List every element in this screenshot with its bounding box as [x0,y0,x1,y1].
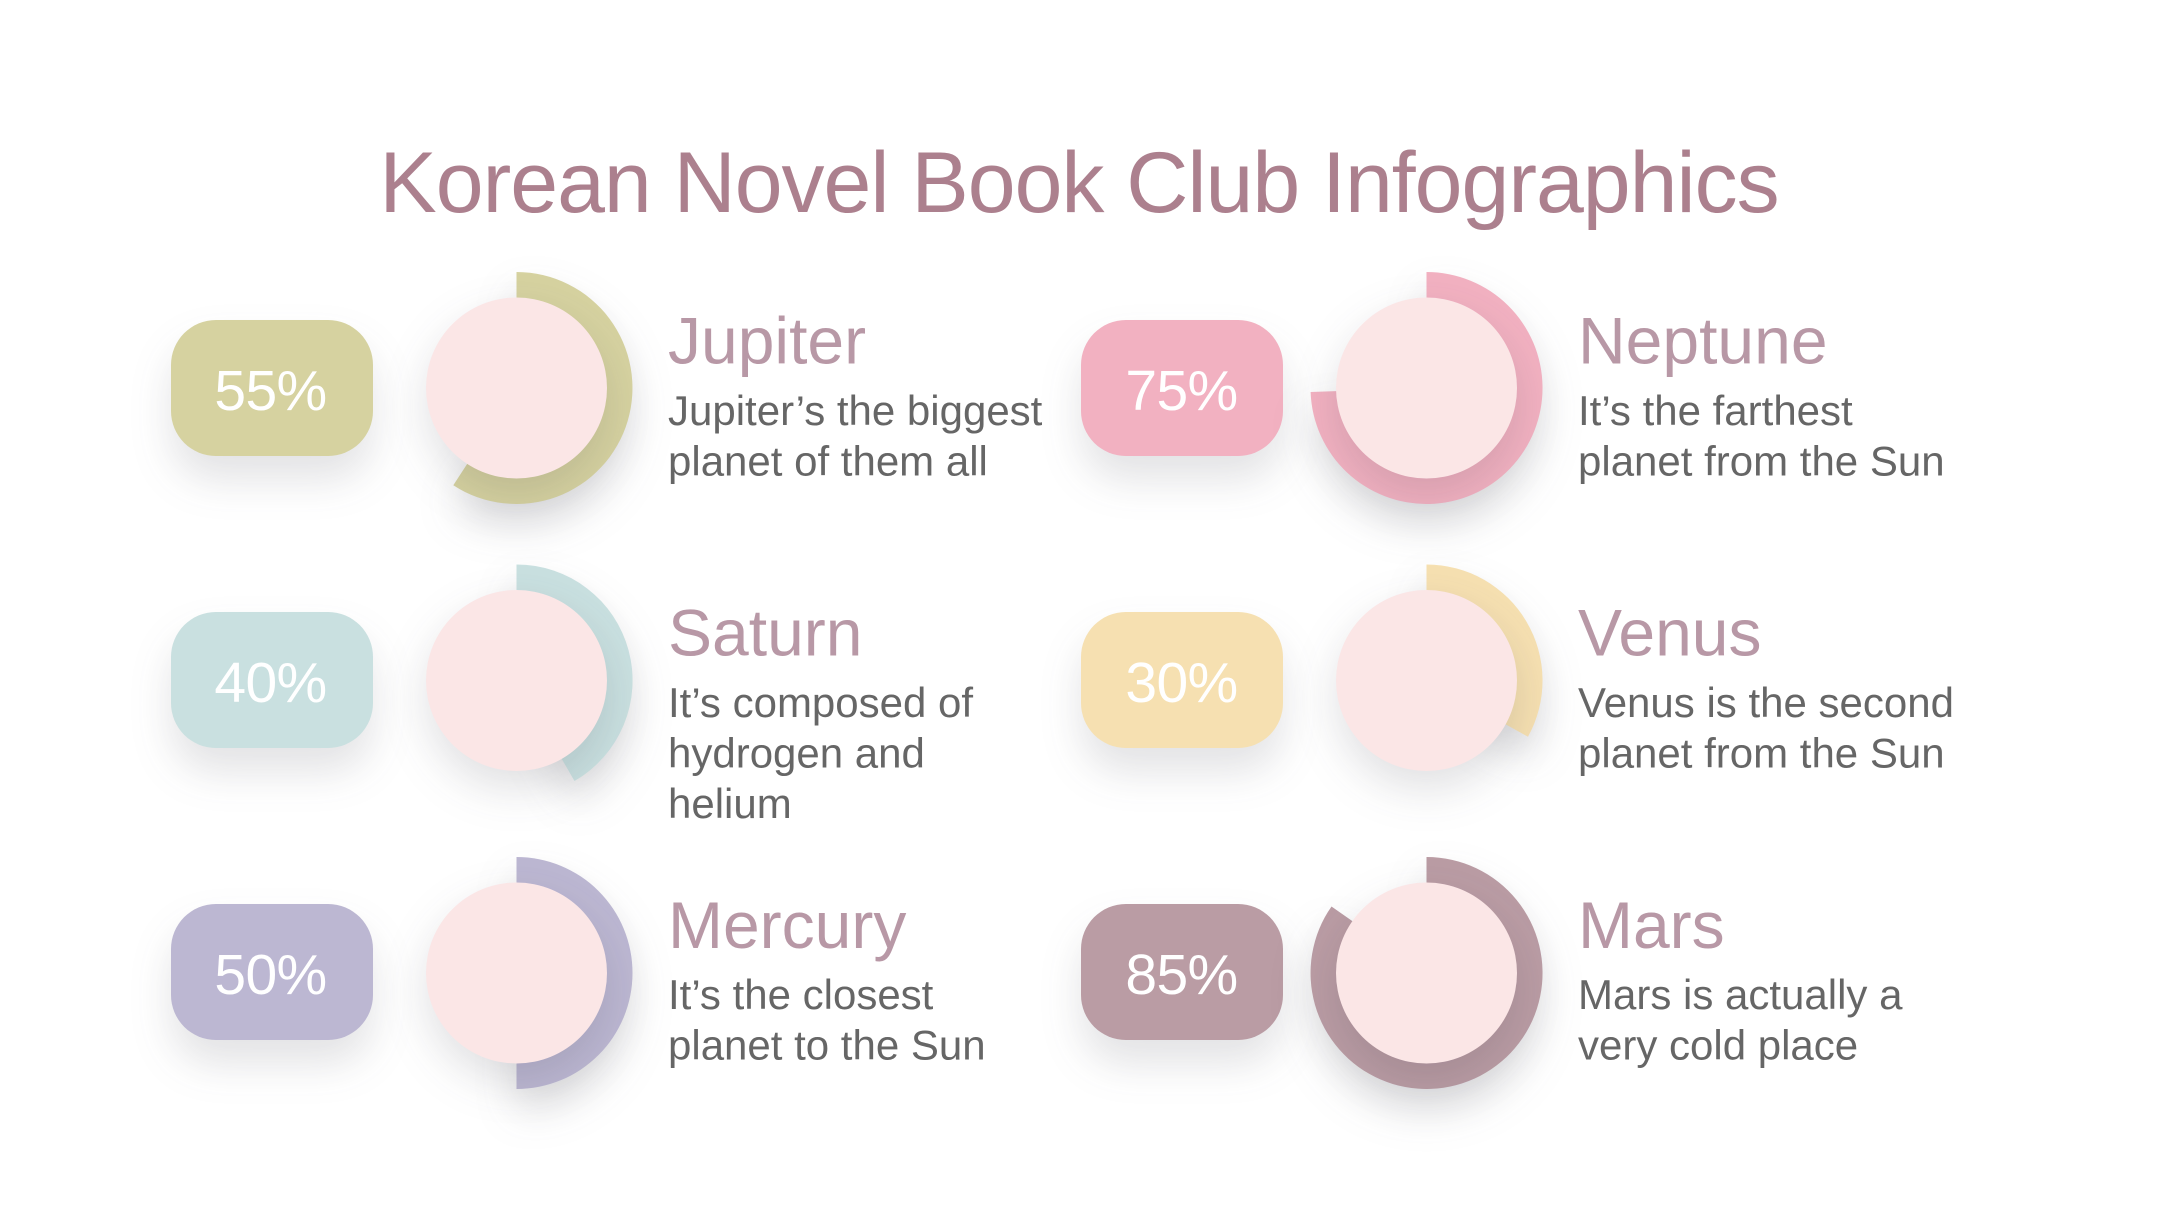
text block: Mars: very cold place [1578,1022,1858,1068]
text block: Mercury: planet to the Sun [668,1022,986,1068]
percentage badge: 75% [1081,320,1283,456]
text block: Jupiter: Jupiter [668,304,866,378]
donut chart: 85% [1311,857,1543,1089]
donut chart: 50% [426,857,632,1089]
text block: Saturn: helium [668,780,792,827]
percentage badge: 30% [1081,612,1283,748]
text block: Mercury [668,888,986,1068]
title: Korean Novel Book Club Infographics [379,135,1779,231]
percentage badge: 85% [1081,904,1283,1040]
text block: Saturn: It’s composed of [668,679,973,726]
panel: Jupiter [171,272,1043,504]
percentage badge: 55% [171,320,373,456]
text block: Mercury: It’s the closest [668,971,934,1018]
percentage badge: 85%: 85% [1125,943,1238,1007]
text block: Venus: Venus [1578,596,1762,670]
text block: Saturn [668,596,973,827]
panel: Venus [1081,564,1954,776]
panel: Neptune [1081,272,1945,504]
text block: Neptune [1578,304,1945,484]
text block: Saturn: hydrogen and [668,730,925,776]
percentage badge: 50% [171,904,373,1040]
panel: Mercury [171,857,986,1089]
text block: Neptune: planet from the Sun [1578,438,1945,484]
text block: Jupiter [668,304,1043,484]
text block: Venus: planet from the Sun [1578,730,1945,776]
panel: Saturn [171,564,973,827]
text block: Venus [1578,596,1954,776]
text block: Jupiter: Jupiter’s the biggest [668,387,1043,434]
text block: Neptune: It’s the farthest [1578,387,1853,434]
text block: Saturn: Saturn [668,596,862,670]
donut chart: 30% [1336,564,1543,771]
text block: Jupiter: planet of them all [668,438,988,484]
percentage badge: 40%: 40% [214,651,327,715]
text block: Venus: Venus is the second [1578,679,1954,726]
text block: Neptune: Neptune [1578,304,1828,378]
donut chart: 40% [426,564,633,781]
donut chart: 75% [1311,272,1543,504]
panel: Mars [1081,857,1903,1089]
text block: Mars: Mars is actually a [1578,971,1903,1018]
percentage badge: 30%: 30% [1125,651,1238,715]
donut chart: 55% [426,272,632,504]
percentage badge: 55%: 55% [214,359,327,423]
percentage badge: 40% [171,612,373,748]
text block: Mercury: Mercury [668,888,906,962]
percentage badge: 50%: 50% [214,943,327,1007]
text block: Mars [1578,888,1903,1068]
text block: Mars: Mars [1578,888,1725,962]
percentage badge: 75%: 75% [1125,359,1238,423]
